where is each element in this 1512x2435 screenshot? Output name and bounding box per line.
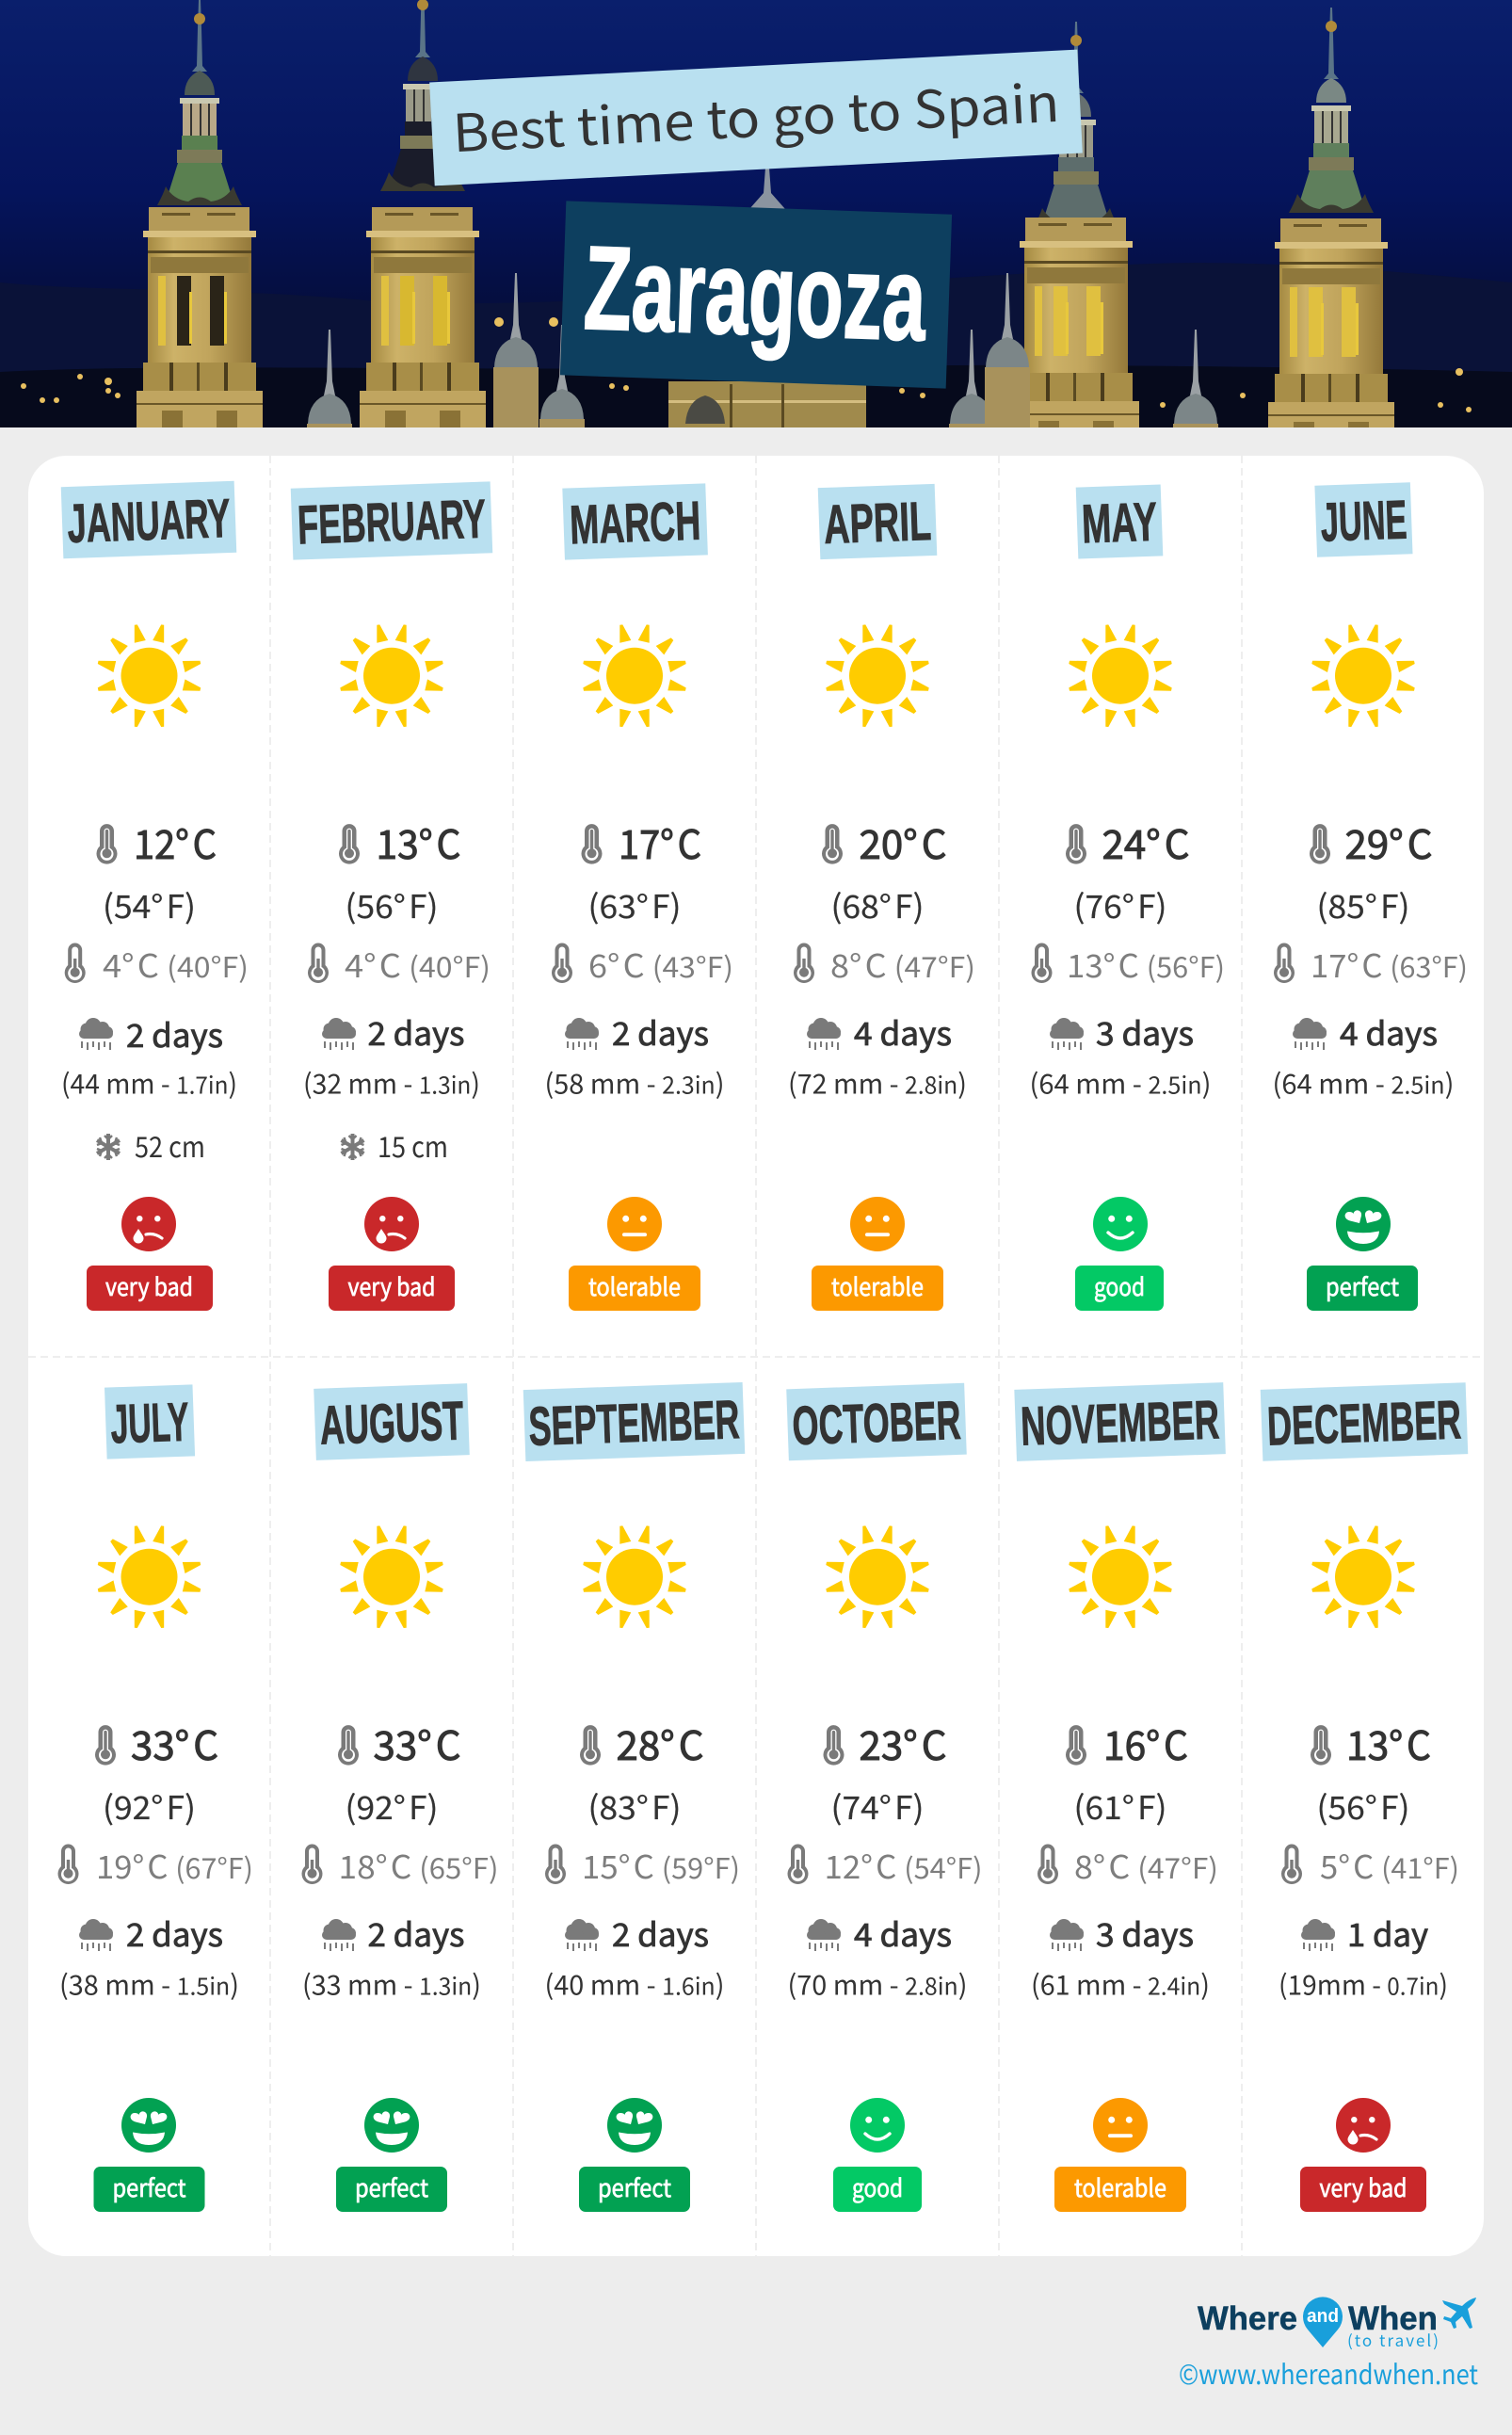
icon: neutral face bbox=[850, 1197, 905, 1251]
icon: sun bbox=[583, 624, 686, 727]
month label: February: FEBRUARY bbox=[297, 489, 487, 556]
high temperature fahrenheit: (61°F) bbox=[1073, 1782, 1167, 1829]
panel: May bbox=[1030, 484, 1225, 1311]
month label: May: MAY bbox=[1081, 492, 1158, 555]
icon: rain cloud bbox=[322, 1919, 356, 1951]
snowfall: 52 cm bbox=[135, 1124, 205, 1166]
icon: thermometer high bbox=[1311, 1725, 1331, 1766]
icon: thermometer high bbox=[95, 1725, 116, 1766]
high temperature: 20°C bbox=[859, 814, 947, 871]
high temperature fahrenheit: (76°F) bbox=[1073, 881, 1167, 927]
rainfall: (58 mm - 2.3in) bbox=[544, 1062, 725, 1102]
rating badge: perfect bbox=[94, 2167, 205, 2212]
rating badge: very bad: very bad bbox=[1320, 2169, 1407, 2204]
panel: February bbox=[291, 481, 492, 1311]
icon: rain cloud bbox=[322, 1018, 356, 1050]
rainy days: 4 days bbox=[854, 1910, 952, 1956]
low temperature: 15°C (59°F) bbox=[582, 1842, 740, 1888]
panel: August bbox=[301, 1383, 499, 2212]
low temperature: 18°C (65°F) bbox=[339, 1842, 499, 1888]
rainy days: 1 day bbox=[1347, 1910, 1428, 1956]
panel: November bbox=[1014, 1382, 1226, 2212]
high temperature: 28°C bbox=[616, 1715, 704, 1772]
high temperature: 13°C bbox=[377, 814, 461, 871]
low temperature: 19°C (67°F) bbox=[96, 1842, 253, 1888]
rainy days: 3 days bbox=[1096, 1008, 1194, 1055]
high temperature: 24°C bbox=[1102, 814, 1190, 871]
rainy days: 2 days bbox=[612, 1910, 709, 1956]
panel: January bbox=[61, 481, 249, 1311]
low temperature: 8°C (47°F) bbox=[830, 941, 975, 987]
rating badge: very bad bbox=[1300, 2167, 1426, 2212]
logo: Where and When to travel: When bbox=[1348, 2300, 1438, 2337]
icon: heart-eyes face bbox=[364, 2098, 419, 2153]
high temperature: 16°C bbox=[1103, 1715, 1188, 1772]
rainy days: 2 days bbox=[367, 1008, 465, 1055]
rainfall: (61 mm - 2.4in) bbox=[1031, 1964, 1210, 2004]
rating badge: perfect: perfect bbox=[598, 2169, 671, 2204]
low temperature: 17°C (63°F) bbox=[1311, 941, 1468, 987]
low temperature: 13°C (56°F) bbox=[1067, 941, 1225, 987]
rating badge: perfect bbox=[336, 2167, 447, 2212]
rating badge: very bad: very bad bbox=[105, 1268, 193, 1303]
panel: October bbox=[786, 1383, 983, 2212]
high temperature: 33°C bbox=[131, 1715, 218, 1772]
month label: July: JULY bbox=[109, 1392, 190, 1455]
icon: thermometer high bbox=[582, 824, 603, 864]
rating badge: perfect: perfect bbox=[113, 2169, 186, 2204]
month label: March bbox=[562, 483, 708, 560]
icon: snowflake bbox=[341, 1134, 363, 1160]
low temperature: 5°C (41°F) bbox=[1320, 1842, 1459, 1888]
icon: rain cloud bbox=[1050, 1018, 1084, 1050]
icon: thermometer low bbox=[65, 943, 86, 983]
icon: thermometer high bbox=[1066, 824, 1086, 864]
high temperature: 17°C bbox=[619, 814, 701, 871]
icon: thermometer high bbox=[338, 1725, 359, 1766]
rainfall: (38 mm - 1.5in) bbox=[59, 1964, 239, 2004]
icon: sun bbox=[583, 1525, 686, 1628]
icon: crying face bbox=[121, 1197, 176, 1251]
icon: thermometer low bbox=[1281, 1844, 1302, 1884]
high temperature fahrenheit: (83°F) bbox=[587, 1782, 682, 1829]
high temperature: 12°C bbox=[134, 814, 217, 871]
high temperature: 33°C bbox=[373, 1715, 461, 1772]
high temperature fahrenheit: (92°F) bbox=[345, 1782, 438, 1829]
icon: heart-eyes face bbox=[607, 2098, 662, 2153]
panel: July bbox=[58, 1384, 253, 2212]
icon: heart-eyes face bbox=[121, 2098, 176, 2153]
rating badge: perfect bbox=[579, 2167, 690, 2212]
icon: rain cloud bbox=[807, 1018, 841, 1050]
month label: March: MARCH bbox=[569, 491, 701, 556]
icon: rain cloud bbox=[1293, 1018, 1327, 1050]
icon: thermometer low bbox=[58, 1844, 79, 1884]
icon: thermometer low bbox=[545, 1844, 566, 1884]
rainfall: (40 mm - 1.6in) bbox=[544, 1964, 725, 2004]
month label: July bbox=[105, 1384, 195, 1459]
icon: thermometer high bbox=[580, 1725, 601, 1766]
rating badge: tolerable: tolerable bbox=[831, 1268, 924, 1303]
rating badge: tolerable bbox=[569, 1266, 700, 1311]
rainfall: (44 mm - 1.7in) bbox=[61, 1062, 237, 1102]
high temperature fahrenheit: (56°F) bbox=[345, 881, 438, 927]
rainy days: 2 days bbox=[367, 1910, 465, 1956]
logo: Where and When to travel bbox=[1198, 2297, 1476, 2351]
logo: Where and When to travel: and bbox=[1307, 2306, 1339, 2327]
month label: September: SEPTEMBER bbox=[527, 1389, 741, 1458]
icon: airplane bbox=[1442, 2298, 1476, 2329]
high temperature: 29°C bbox=[1344, 814, 1433, 871]
icon: sun bbox=[1311, 1525, 1415, 1628]
title banner: Best time to go to Spain: Best time to go to Spain bbox=[451, 61, 1061, 167]
icon: thermometer low bbox=[787, 1844, 808, 1884]
icon: smiling face bbox=[1093, 1197, 1148, 1251]
rating badge: perfect: perfect bbox=[1326, 1268, 1399, 1303]
month label: November bbox=[1014, 1382, 1226, 1461]
high temperature fahrenheit: (68°F) bbox=[830, 881, 925, 927]
month label: September bbox=[523, 1382, 745, 1461]
icon: sun bbox=[1311, 624, 1415, 727]
rating badge: tolerable bbox=[812, 1266, 943, 1311]
rainy days: 2 days bbox=[126, 1010, 223, 1056]
header photo: Zaragoza basilica towers at night bbox=[0, 0, 1512, 427]
icon: sun bbox=[340, 1525, 443, 1628]
month label: May bbox=[1076, 484, 1163, 559]
icon: neutral face bbox=[607, 1197, 662, 1251]
rainy days: 4 days bbox=[854, 1008, 952, 1055]
rainy days: 2 days bbox=[126, 1910, 223, 1956]
logo: Where and When to travel: (to travel) bbox=[1347, 2328, 1439, 2351]
panel: December bbox=[1261, 1382, 1468, 2212]
month label: June: JUNE bbox=[1320, 489, 1407, 554]
high temperature fahrenheit: (74°F) bbox=[830, 1782, 925, 1829]
panel: June bbox=[1273, 482, 1468, 1311]
icon: thermometer high bbox=[96, 824, 117, 864]
low temperature: 4°C (40°F) bbox=[345, 941, 491, 987]
high temperature fahrenheit: (92°F) bbox=[103, 1782, 196, 1829]
icon: thermometer low bbox=[308, 943, 329, 983]
icon: rain cloud bbox=[807, 1919, 841, 1951]
rating badge: good: good bbox=[852, 2169, 903, 2204]
high temperature fahrenheit: (54°F) bbox=[103, 881, 196, 927]
website credit: ©www.whereandwhen.net bbox=[1179, 2353, 1478, 2393]
icon: sun bbox=[826, 624, 929, 727]
panel: April bbox=[788, 484, 975, 1311]
icon: thermometer high bbox=[339, 824, 360, 864]
rainfall: (64 mm - 2.5in) bbox=[1273, 1062, 1454, 1102]
logo: Where and When to travel: Where bbox=[1198, 2300, 1297, 2337]
high temperature: 23°C bbox=[859, 1715, 947, 1772]
rating badge: good bbox=[833, 2167, 922, 2212]
icon: thermometer low bbox=[1037, 1844, 1058, 1884]
high temperature: 13°C bbox=[1346, 1715, 1431, 1772]
icon: thermometer low bbox=[552, 943, 572, 983]
title banner: Zaragoza bbox=[560, 201, 952, 389]
month label: August bbox=[314, 1383, 470, 1460]
calendar card bbox=[28, 456, 1484, 2256]
month label: October: OCTOBER bbox=[791, 1390, 962, 1457]
rainfall: (72 mm - 2.8in) bbox=[788, 1062, 967, 1102]
month label: April bbox=[818, 484, 937, 559]
rating badge: very bad bbox=[87, 1266, 213, 1311]
panel: September bbox=[523, 1382, 745, 2212]
rainfall: (32 mm - 1.3in) bbox=[303, 1062, 480, 1102]
high temperature fahrenheit: (85°F) bbox=[1316, 881, 1410, 927]
panel: March bbox=[544, 483, 733, 1311]
icon: crying face bbox=[1336, 2098, 1391, 2153]
rating badge: very bad: very bad bbox=[348, 1268, 435, 1303]
high temperature fahrenheit: (56°F) bbox=[1316, 1782, 1410, 1829]
rainy days: 2 days bbox=[612, 1008, 709, 1055]
icon: rain cloud bbox=[565, 1018, 599, 1050]
icon: thermometer high bbox=[822, 824, 843, 864]
high temperature fahrenheit: (63°F) bbox=[587, 881, 682, 927]
month label: February bbox=[291, 481, 492, 560]
month label: January: JANUARY bbox=[66, 488, 232, 555]
icon: map pin bbox=[1303, 2297, 1343, 2347]
icon: thermometer low bbox=[301, 1844, 322, 1884]
icon: rain cloud bbox=[79, 1919, 113, 1951]
rating badge: tolerable: tolerable bbox=[588, 1268, 681, 1303]
month label: June bbox=[1314, 482, 1412, 557]
icon: thermometer low bbox=[1032, 943, 1053, 983]
month label: August: AUGUST bbox=[319, 1390, 464, 1457]
rating badge: very bad bbox=[329, 1266, 455, 1311]
icon: thermometer low bbox=[794, 943, 814, 983]
low temperature: 8°C (47°F) bbox=[1074, 1842, 1218, 1888]
title banner: Best time to go to Spain bbox=[429, 50, 1083, 185]
month label: October bbox=[786, 1383, 967, 1460]
snowfall: 15 cm bbox=[378, 1124, 448, 1166]
icon: sun bbox=[1069, 624, 1172, 727]
icon: snowflake bbox=[97, 1134, 120, 1160]
icon: smiling face bbox=[850, 2098, 905, 2153]
month label: January bbox=[61, 481, 236, 558]
icon: thermometer high bbox=[1066, 1725, 1086, 1766]
low temperature: 4°C (40°F) bbox=[103, 941, 249, 987]
icon: thermometer low bbox=[1274, 943, 1295, 983]
icon: sun bbox=[826, 1525, 929, 1628]
icon: sun bbox=[98, 624, 201, 727]
icon: heart-eyes face bbox=[1336, 1197, 1391, 1251]
low temperature: 6°C (43°F) bbox=[588, 941, 733, 987]
icon: thermometer high bbox=[823, 1725, 844, 1766]
rating badge: perfect: perfect bbox=[355, 2169, 428, 2204]
title banner: Zaragoza: Zaragoza bbox=[582, 221, 928, 365]
month label: November: NOVEMBER bbox=[1020, 1389, 1220, 1458]
rating badge: tolerable: tolerable bbox=[1074, 2169, 1166, 2204]
rating badge: tolerable bbox=[1054, 2167, 1186, 2212]
icon: rain cloud bbox=[565, 1919, 599, 1951]
rainfall: (33 mm - 1.3in) bbox=[302, 1964, 481, 2004]
rating badge: good bbox=[1075, 1266, 1164, 1311]
month label: April: APRIL bbox=[823, 491, 932, 556]
rainfall: (19mm - 0.7in) bbox=[1279, 1964, 1448, 2004]
rating badge: good: good bbox=[1094, 1268, 1145, 1303]
rainfall: (70 mm - 2.8in) bbox=[787, 1964, 968, 2004]
icon: rain cloud bbox=[79, 1018, 113, 1050]
low temperature: 12°C (54°F) bbox=[825, 1842, 983, 1888]
rating badge: perfect bbox=[1307, 1266, 1418, 1311]
rainfall: (64 mm - 2.5in) bbox=[1030, 1062, 1211, 1102]
icon: sun bbox=[98, 1525, 201, 1628]
icon: rain cloud bbox=[1050, 1919, 1084, 1951]
icon: thermometer high bbox=[1310, 824, 1330, 864]
icon: neutral face bbox=[1093, 2098, 1148, 2153]
icon: rain cloud bbox=[1301, 1919, 1335, 1951]
icon: sun bbox=[1069, 1525, 1172, 1628]
icon: sun bbox=[340, 624, 443, 727]
rainy days: 4 days bbox=[1340, 1008, 1438, 1055]
rainy days: 3 days bbox=[1096, 1910, 1194, 1956]
icon: crying face bbox=[364, 1197, 419, 1251]
